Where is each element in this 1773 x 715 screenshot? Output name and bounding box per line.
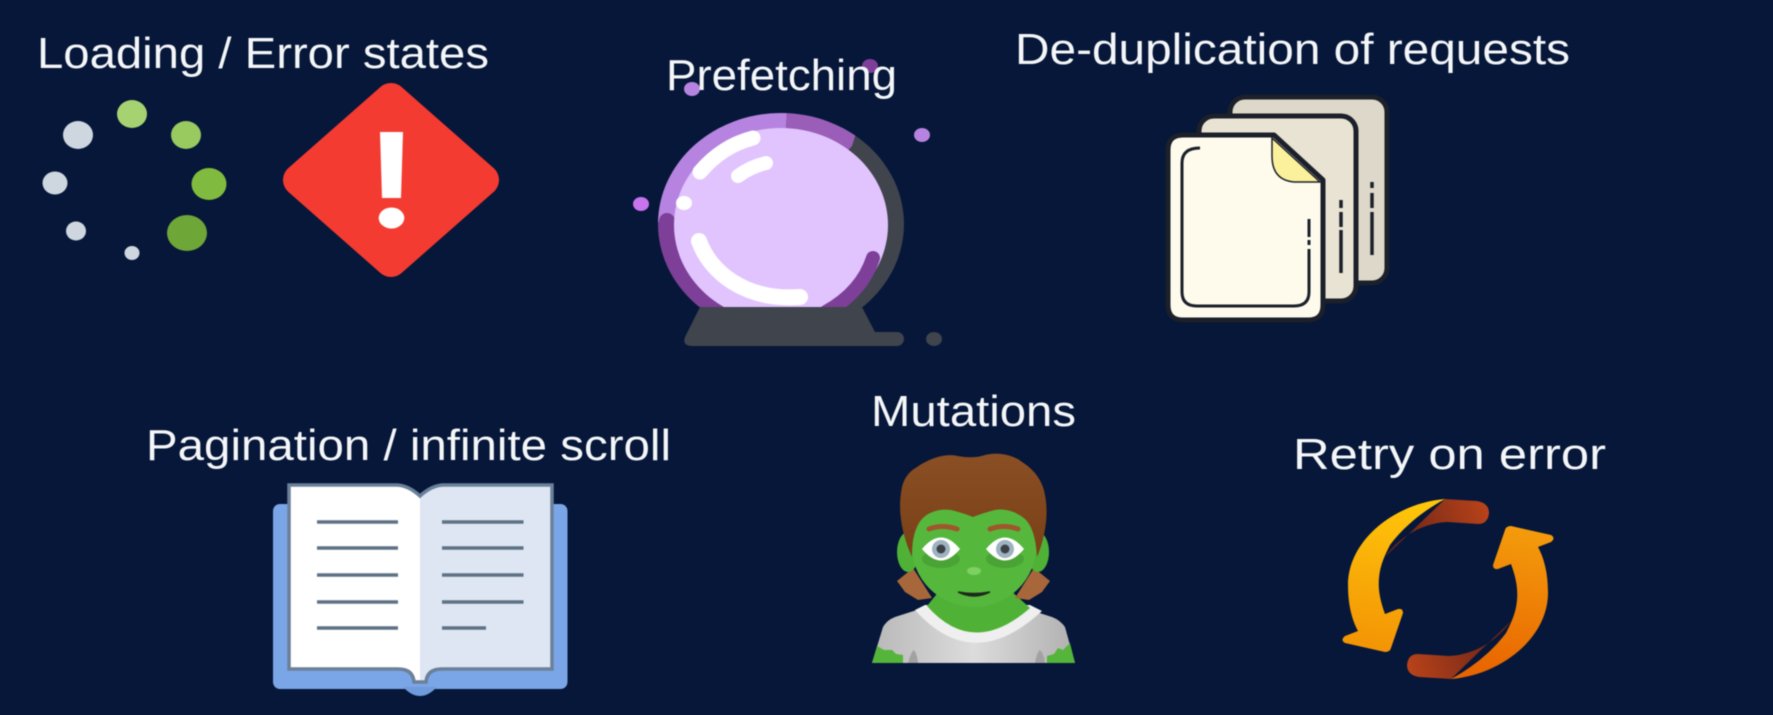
heading: mutations: Mutations: [871, 387, 1076, 436]
icon: stacked documents: [1168, 97, 1387, 320]
heading: retry on error: Retry on error: [1293, 430, 1606, 479]
panel: loading and error states: [37, 29, 489, 261]
heading: loading / error states: Loading / Error states: [37, 29, 489, 78]
icon: zombie: [872, 454, 1075, 663]
icon: circular retry arrows: [1342, 499, 1554, 679]
icon: open book: [273, 485, 568, 696]
icon: loading spinner: [42, 100, 226, 260]
panel: retry on error: [1293, 430, 1606, 679]
heading: de-duplication of requests: De-duplication of requests: [1015, 25, 1570, 74]
panel: de-duplication of requests: [1015, 25, 1570, 320]
panel: prefetching: [633, 51, 942, 346]
panel: mutations: [871, 387, 1076, 663]
icon: crystal ball: [633, 59, 942, 346]
panel: pagination / infinite scroll: [146, 421, 671, 696]
heading: prefetching: Prefetching: [666, 51, 897, 100]
icon: red warning diamond: [299, 99, 483, 261]
heading: pagination / infinite scroll: Pagination / infinite scroll: [146, 421, 671, 470]
